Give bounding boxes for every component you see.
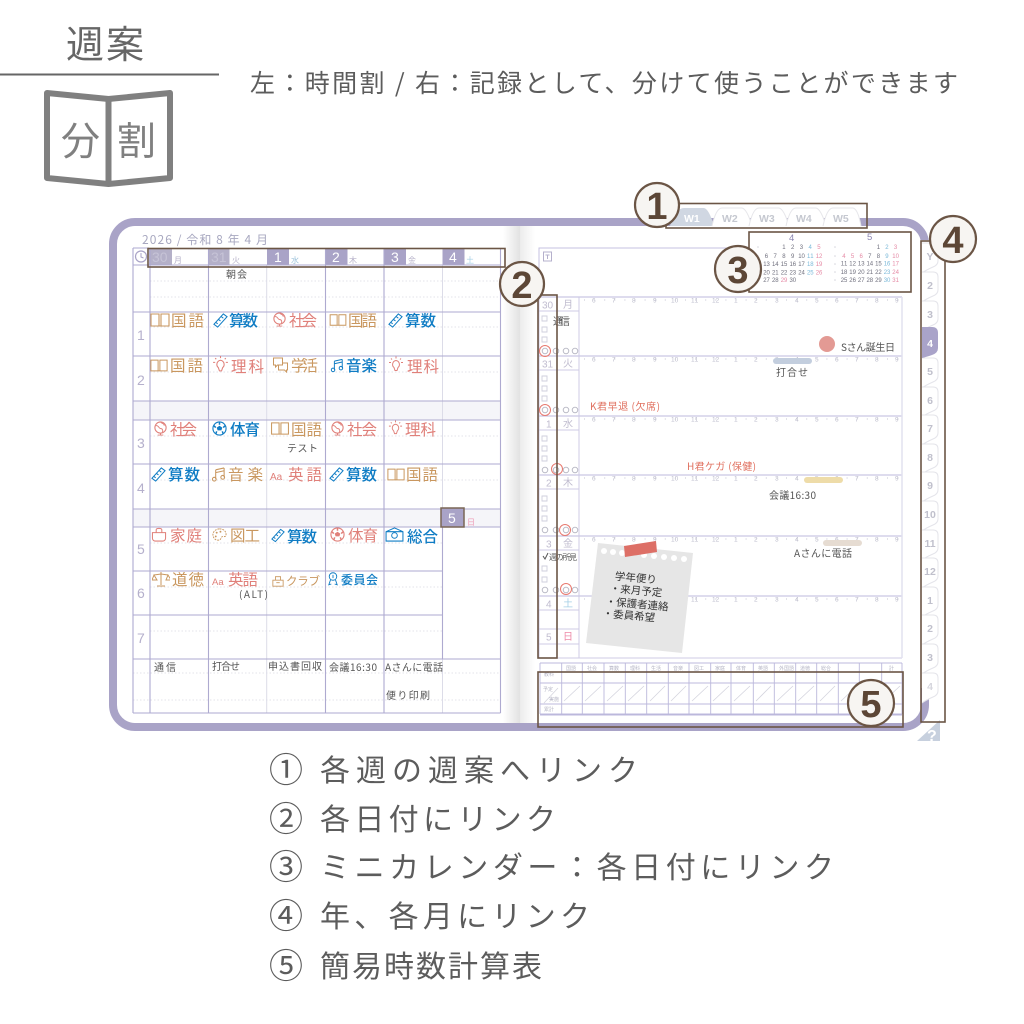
period 5 subjects: 家庭 bbox=[170, 524, 202, 546]
period 3 subjects: 体育 bbox=[230, 418, 260, 440]
legend item 4: 年、各月にリンク bbox=[320, 892, 590, 936]
checkboxes and weather marks bbox=[540, 316, 578, 594]
left page header: 2026 / 令和 8 年 4 月 bbox=[142, 231, 268, 248]
schedule highlights and notes: 通信 bbox=[553, 313, 570, 328]
handwritten notes: left page: 申込書回収 bbox=[268, 658, 322, 673]
mini calendar: 11 bbox=[807, 254, 814, 260]
hours calculation table: 理科 bbox=[630, 665, 640, 672]
left page header: 土 bbox=[466, 255, 474, 266]
left page header: 水 bbox=[291, 255, 299, 266]
mini calendar: 31 bbox=[892, 278, 900, 284]
mini calendar: 26 bbox=[816, 270, 823, 276]
hour rulers: 6789101112123456789 bbox=[592, 476, 899, 482]
date and weekday labels: 土 bbox=[563, 595, 573, 610]
help corner: ? bbox=[927, 728, 937, 745]
date and weekday labels: 1 bbox=[546, 420, 552, 430]
subtitle: 左：時間割 / 右：記録として、分けて使うことができます bbox=[250, 64, 958, 100]
hours calculation table: 算数 bbox=[609, 665, 619, 672]
callout number 4 bbox=[930, 216, 976, 262]
period 5 subjects: 体育 bbox=[348, 524, 378, 546]
hours calculation table: 道徳 bbox=[800, 665, 810, 672]
period 3 subjects: 社会 bbox=[347, 418, 377, 440]
left page header: 31 bbox=[211, 249, 227, 265]
period numbers: 7 bbox=[137, 630, 145, 646]
date and weekday labels: 5 bbox=[546, 632, 552, 644]
period numbers: 1 bbox=[137, 327, 145, 343]
mini calendar: 10 bbox=[892, 254, 900, 260]
hours calculation table: 教科 bbox=[544, 671, 554, 678]
week tabs: W5 bbox=[833, 213, 849, 225]
legend item 5: 簡易時数計算表 bbox=[320, 942, 542, 986]
mini calendar: 12 bbox=[816, 254, 823, 260]
callout number 4: 4 bbox=[942, 220, 964, 262]
period 1 subjects: 算数 bbox=[229, 309, 258, 331]
month tabs: 12 bbox=[924, 566, 936, 578]
month tabs: 9 bbox=[927, 480, 933, 492]
period 2 subjects: 理科 bbox=[231, 355, 264, 377]
hours calculation table: 外国語 bbox=[779, 665, 794, 672]
hour rulers: 6789101112123456789 bbox=[592, 298, 899, 304]
date and weekday labels: 日 bbox=[563, 628, 573, 643]
month tabs: 11 bbox=[924, 538, 936, 550]
sticky note: ・来月予定 bbox=[609, 581, 663, 600]
month tabs: 3 bbox=[927, 309, 933, 321]
period 6 subjects: 英語 bbox=[228, 568, 258, 590]
month tabs: 7 bbox=[927, 423, 933, 435]
date and weekday labels: 30 bbox=[542, 300, 554, 312]
mini calendar: 4 bbox=[789, 233, 794, 244]
daily log grid bbox=[539, 297, 902, 658]
mini calendar bbox=[757, 232, 900, 284]
period 1 subjects: 国語 bbox=[348, 309, 377, 331]
mini calendar: 25 bbox=[807, 270, 814, 276]
mini calendar: 3 bbox=[894, 245, 898, 251]
period 3 subjects: 社会 bbox=[170, 418, 197, 440]
left page header: 火 bbox=[232, 255, 240, 266]
hours calculation table: 国語 bbox=[566, 666, 576, 672]
mini calendar: 23 bbox=[884, 270, 891, 276]
period 4 subjects: 算数 bbox=[168, 463, 200, 485]
week tabs: W1 bbox=[684, 213, 700, 225]
callout number 1: 1 bbox=[646, 186, 668, 228]
period numbers: 6 bbox=[137, 585, 145, 601]
legend list bbox=[269, 743, 834, 988]
planner spread bbox=[113, 208, 940, 745]
date and weekday labels: 2 bbox=[546, 478, 552, 490]
week tabs: W2 bbox=[722, 213, 738, 225]
period 3 subjects bbox=[155, 418, 436, 455]
hours calculation table: 音楽 bbox=[673, 665, 683, 672]
hour rulers: 6789101112123456789 bbox=[592, 536, 899, 544]
Monday date chip: 5 bbox=[448, 510, 456, 526]
callout number 2 bbox=[500, 262, 544, 307]
period 5 subjects: 図工 bbox=[230, 524, 260, 546]
period 2 subjects bbox=[151, 354, 439, 377]
mini calendar: 30 bbox=[884, 278, 891, 284]
icon: open book with 分割: 分 bbox=[61, 111, 100, 167]
mini calendar: 24 bbox=[892, 270, 900, 276]
period 5 subjects: 算数 bbox=[287, 525, 317, 547]
period 4 subjects: 英語 bbox=[288, 463, 322, 485]
date and weekday labels: 月 bbox=[563, 296, 573, 311]
period 6 subjects: 道徳 bbox=[172, 568, 204, 590]
month tabs: 1 bbox=[927, 595, 933, 607]
period 2 subjects: 理科 bbox=[407, 355, 439, 377]
handwritten notes: left page: 便り印刷 bbox=[386, 687, 430, 702]
period 4 subjects: 算数 bbox=[346, 463, 377, 485]
handwritten notes: left page: 通信 bbox=[154, 659, 176, 674]
period 1 subjects: 算数 bbox=[405, 309, 436, 331]
hours calculation table: 英語 bbox=[758, 665, 768, 672]
mini calendar: 29 bbox=[781, 278, 788, 284]
legend item 2: ② bbox=[269, 792, 303, 841]
date and weekday labels: 4 bbox=[546, 600, 552, 610]
month tabs: 5 bbox=[927, 366, 933, 378]
callout number 1 bbox=[635, 183, 679, 228]
month tabs: 2 bbox=[927, 623, 933, 635]
mini calendar: 1 bbox=[877, 245, 881, 251]
title: 週案 bbox=[66, 14, 144, 69]
schedule highlights and notes: K君早退 (欠席) bbox=[590, 398, 660, 413]
mini calendar: 18 bbox=[807, 262, 814, 268]
month tabs: 6 bbox=[927, 395, 933, 407]
period 2 subjects: 国語 bbox=[170, 354, 203, 376]
period 4 subjects bbox=[152, 463, 438, 485]
schedule highlights and notes: Aさんに電話 bbox=[794, 545, 852, 560]
period 5 subjects: 総合 bbox=[407, 525, 438, 547]
hour rulers: 1112123456789 bbox=[691, 596, 899, 604]
hour rulers: 6789101112123456789 bbox=[592, 416, 899, 424]
callout boxes bbox=[148, 204, 945, 727]
help corner bbox=[917, 720, 940, 745]
hour rulers bbox=[584, 298, 900, 604]
hours calculation table: 社会 bbox=[587, 665, 597, 672]
hours calculation table: 図工 bbox=[694, 666, 704, 672]
mini calendar: 30 bbox=[790, 278, 797, 284]
month tabs: 4 bbox=[927, 681, 933, 693]
left page header: 30 bbox=[152, 249, 168, 265]
mini calendar: 123 bbox=[782, 245, 804, 251]
legend item 1: ① bbox=[269, 743, 303, 792]
period 3 subjects: 理科 bbox=[405, 418, 436, 440]
period 1 subjects bbox=[151, 309, 436, 331]
schedule highlights and notes: 会議16:30 bbox=[769, 487, 816, 502]
period 6 subjects: 委員会 bbox=[341, 571, 378, 588]
week tabs: W4 bbox=[796, 213, 812, 225]
timetable grid bbox=[133, 248, 500, 713]
hours calculation table bbox=[540, 663, 902, 714]
mini calendar: 19 bbox=[816, 262, 823, 268]
mini calendar: 2526272829 bbox=[841, 278, 882, 284]
period 4 subjects: 音楽 bbox=[228, 463, 263, 485]
period 6 subjects: (ALT) bbox=[239, 586, 268, 601]
hours calculation table: 累計 bbox=[544, 706, 554, 713]
mini calendar: 9 bbox=[885, 254, 889, 260]
hours calculation table: 体育 bbox=[736, 665, 746, 672]
week tabs bbox=[670, 208, 861, 226]
mini calendar: 16 bbox=[884, 262, 891, 268]
period 6 subjects: Aa bbox=[212, 577, 224, 588]
period 2 subjects: 学活 bbox=[291, 354, 318, 376]
date and weekday labels bbox=[542, 296, 573, 644]
hours calculation table: 生活 bbox=[651, 665, 661, 672]
legend item 3: ③ bbox=[269, 840, 303, 889]
sticky note bbox=[586, 541, 693, 653]
date and weekday labels: 金 bbox=[563, 535, 573, 550]
handwritten notes: left page bbox=[154, 266, 443, 702]
legend item 2: 各日付にリンク bbox=[320, 795, 556, 839]
month tabs bbox=[920, 240, 940, 703]
icon: open book with 分割: 割 bbox=[117, 111, 156, 167]
icon: open book with 分割 bbox=[47, 93, 170, 184]
mini calendar: 678910 bbox=[765, 254, 806, 260]
mini calendar: 4 bbox=[808, 245, 812, 251]
week tabs: W3 bbox=[759, 213, 775, 225]
period numbers bbox=[137, 327, 145, 646]
schedule highlights and notes bbox=[543, 313, 895, 563]
month tabs: 3 bbox=[927, 652, 933, 664]
period 6 subjects bbox=[152, 568, 378, 601]
legend item 4: ④ bbox=[269, 889, 303, 938]
date and weekday labels: 木 bbox=[563, 474, 573, 489]
left page header: 3 bbox=[391, 249, 399, 265]
hours calculation table: 計 bbox=[889, 665, 894, 672]
schedule highlights and notes: 打合せ bbox=[776, 364, 808, 379]
month tabs: 8 bbox=[927, 452, 933, 464]
date and weekday labels: 3 bbox=[546, 540, 552, 550]
left page header: 木 bbox=[349, 255, 357, 266]
period numbers: 2 bbox=[137, 372, 145, 388]
mini calendar: 17 bbox=[892, 262, 900, 268]
callout number 3: 3 bbox=[727, 250, 749, 292]
period numbers: 3 bbox=[137, 435, 145, 451]
Monday date chip bbox=[441, 508, 475, 528]
mini calendar: 456 bbox=[842, 254, 864, 260]
period 4 subjects: Aa bbox=[270, 472, 283, 483]
date and weekday labels: 31 bbox=[542, 360, 554, 370]
mini calendar: 1819202122 bbox=[841, 270, 882, 276]
mini calendar: 2021222324 bbox=[763, 270, 806, 276]
period 1 subjects: 社会 bbox=[289, 309, 317, 331]
date and weekday labels: 火 bbox=[563, 355, 573, 370]
handwritten notes: left page: 打合せ bbox=[212, 658, 240, 673]
period 4 subjects: 国語 bbox=[406, 463, 438, 485]
memo box bbox=[539, 248, 749, 297]
Monday date chip: 日 bbox=[467, 517, 475, 528]
mini calendar: 5 bbox=[817, 245, 821, 251]
period 5 subjects bbox=[152, 524, 438, 547]
month tabs: 4 bbox=[927, 338, 933, 350]
handwritten notes: left page: 朝会 bbox=[226, 266, 247, 281]
period 1 subjects: 国語 bbox=[171, 309, 204, 331]
mini calendar: 2 bbox=[885, 245, 889, 251]
schedule highlights and notes: Sさん誕生日 bbox=[841, 339, 895, 354]
schedule highlights and notes: H君ケガ (保健) bbox=[687, 458, 756, 473]
period numbers: 5 bbox=[137, 541, 145, 557]
hours calculation table: 予定 bbox=[543, 686, 553, 693]
left page header: 1 bbox=[274, 249, 282, 265]
date and weekday labels: 水 bbox=[563, 415, 573, 430]
period 3 subjects: 国語 bbox=[291, 418, 322, 440]
left page header: 月 bbox=[174, 255, 182, 266]
hours calculation table: 実施 bbox=[549, 696, 559, 703]
left page header: 4 bbox=[449, 249, 457, 265]
period 6 subjects: クラブ bbox=[286, 573, 320, 589]
mini calendar: 1314151617 bbox=[763, 262, 806, 268]
callout number 3 bbox=[715, 246, 761, 292]
hour rulers: 6789101112123456789 bbox=[592, 356, 899, 364]
sticky note: ・保護者連絡 bbox=[605, 594, 670, 615]
mini calendar: 78 bbox=[868, 254, 881, 260]
left page header bbox=[136, 231, 474, 266]
handwritten notes: left page: 会議16:30 bbox=[329, 659, 377, 674]
legend item 1: 各週の週案へリンク bbox=[320, 746, 638, 790]
month tabs: 2 bbox=[927, 280, 933, 292]
period numbers: 4 bbox=[137, 480, 145, 496]
callout number 5: 5 bbox=[860, 684, 882, 726]
mini calendar: 5 bbox=[867, 232, 872, 243]
legend item 3: ミニカレンダー：各日付にリンク bbox=[320, 843, 834, 887]
callout number 5 bbox=[848, 680, 894, 726]
page background bbox=[113, 222, 925, 727]
mini calendar: 1112131415 bbox=[841, 262, 882, 268]
month tabs: 10 bbox=[924, 509, 936, 521]
left page header: 2 bbox=[332, 249, 340, 265]
sticky note: ・委員希望 bbox=[602, 606, 656, 625]
period 2 subjects: 音楽 bbox=[346, 354, 377, 376]
mini calendar: 2728 bbox=[763, 278, 779, 284]
period 3 subjects: テスト bbox=[287, 440, 318, 455]
hours calculation table: 総合 bbox=[821, 665, 831, 672]
schedule highlights and notes: 週の所見 bbox=[549, 552, 577, 563]
legend item 5: ⑤ bbox=[269, 939, 303, 988]
hours calculation table: 家庭 bbox=[715, 665, 725, 672]
left page header: 金 bbox=[408, 255, 416, 266]
sticky note: 学年便り bbox=[614, 569, 657, 587]
month tabs: Y bbox=[926, 251, 934, 263]
callout number 2: 2 bbox=[511, 265, 533, 307]
handwritten notes: left page: Aさんに電話 bbox=[385, 659, 443, 674]
